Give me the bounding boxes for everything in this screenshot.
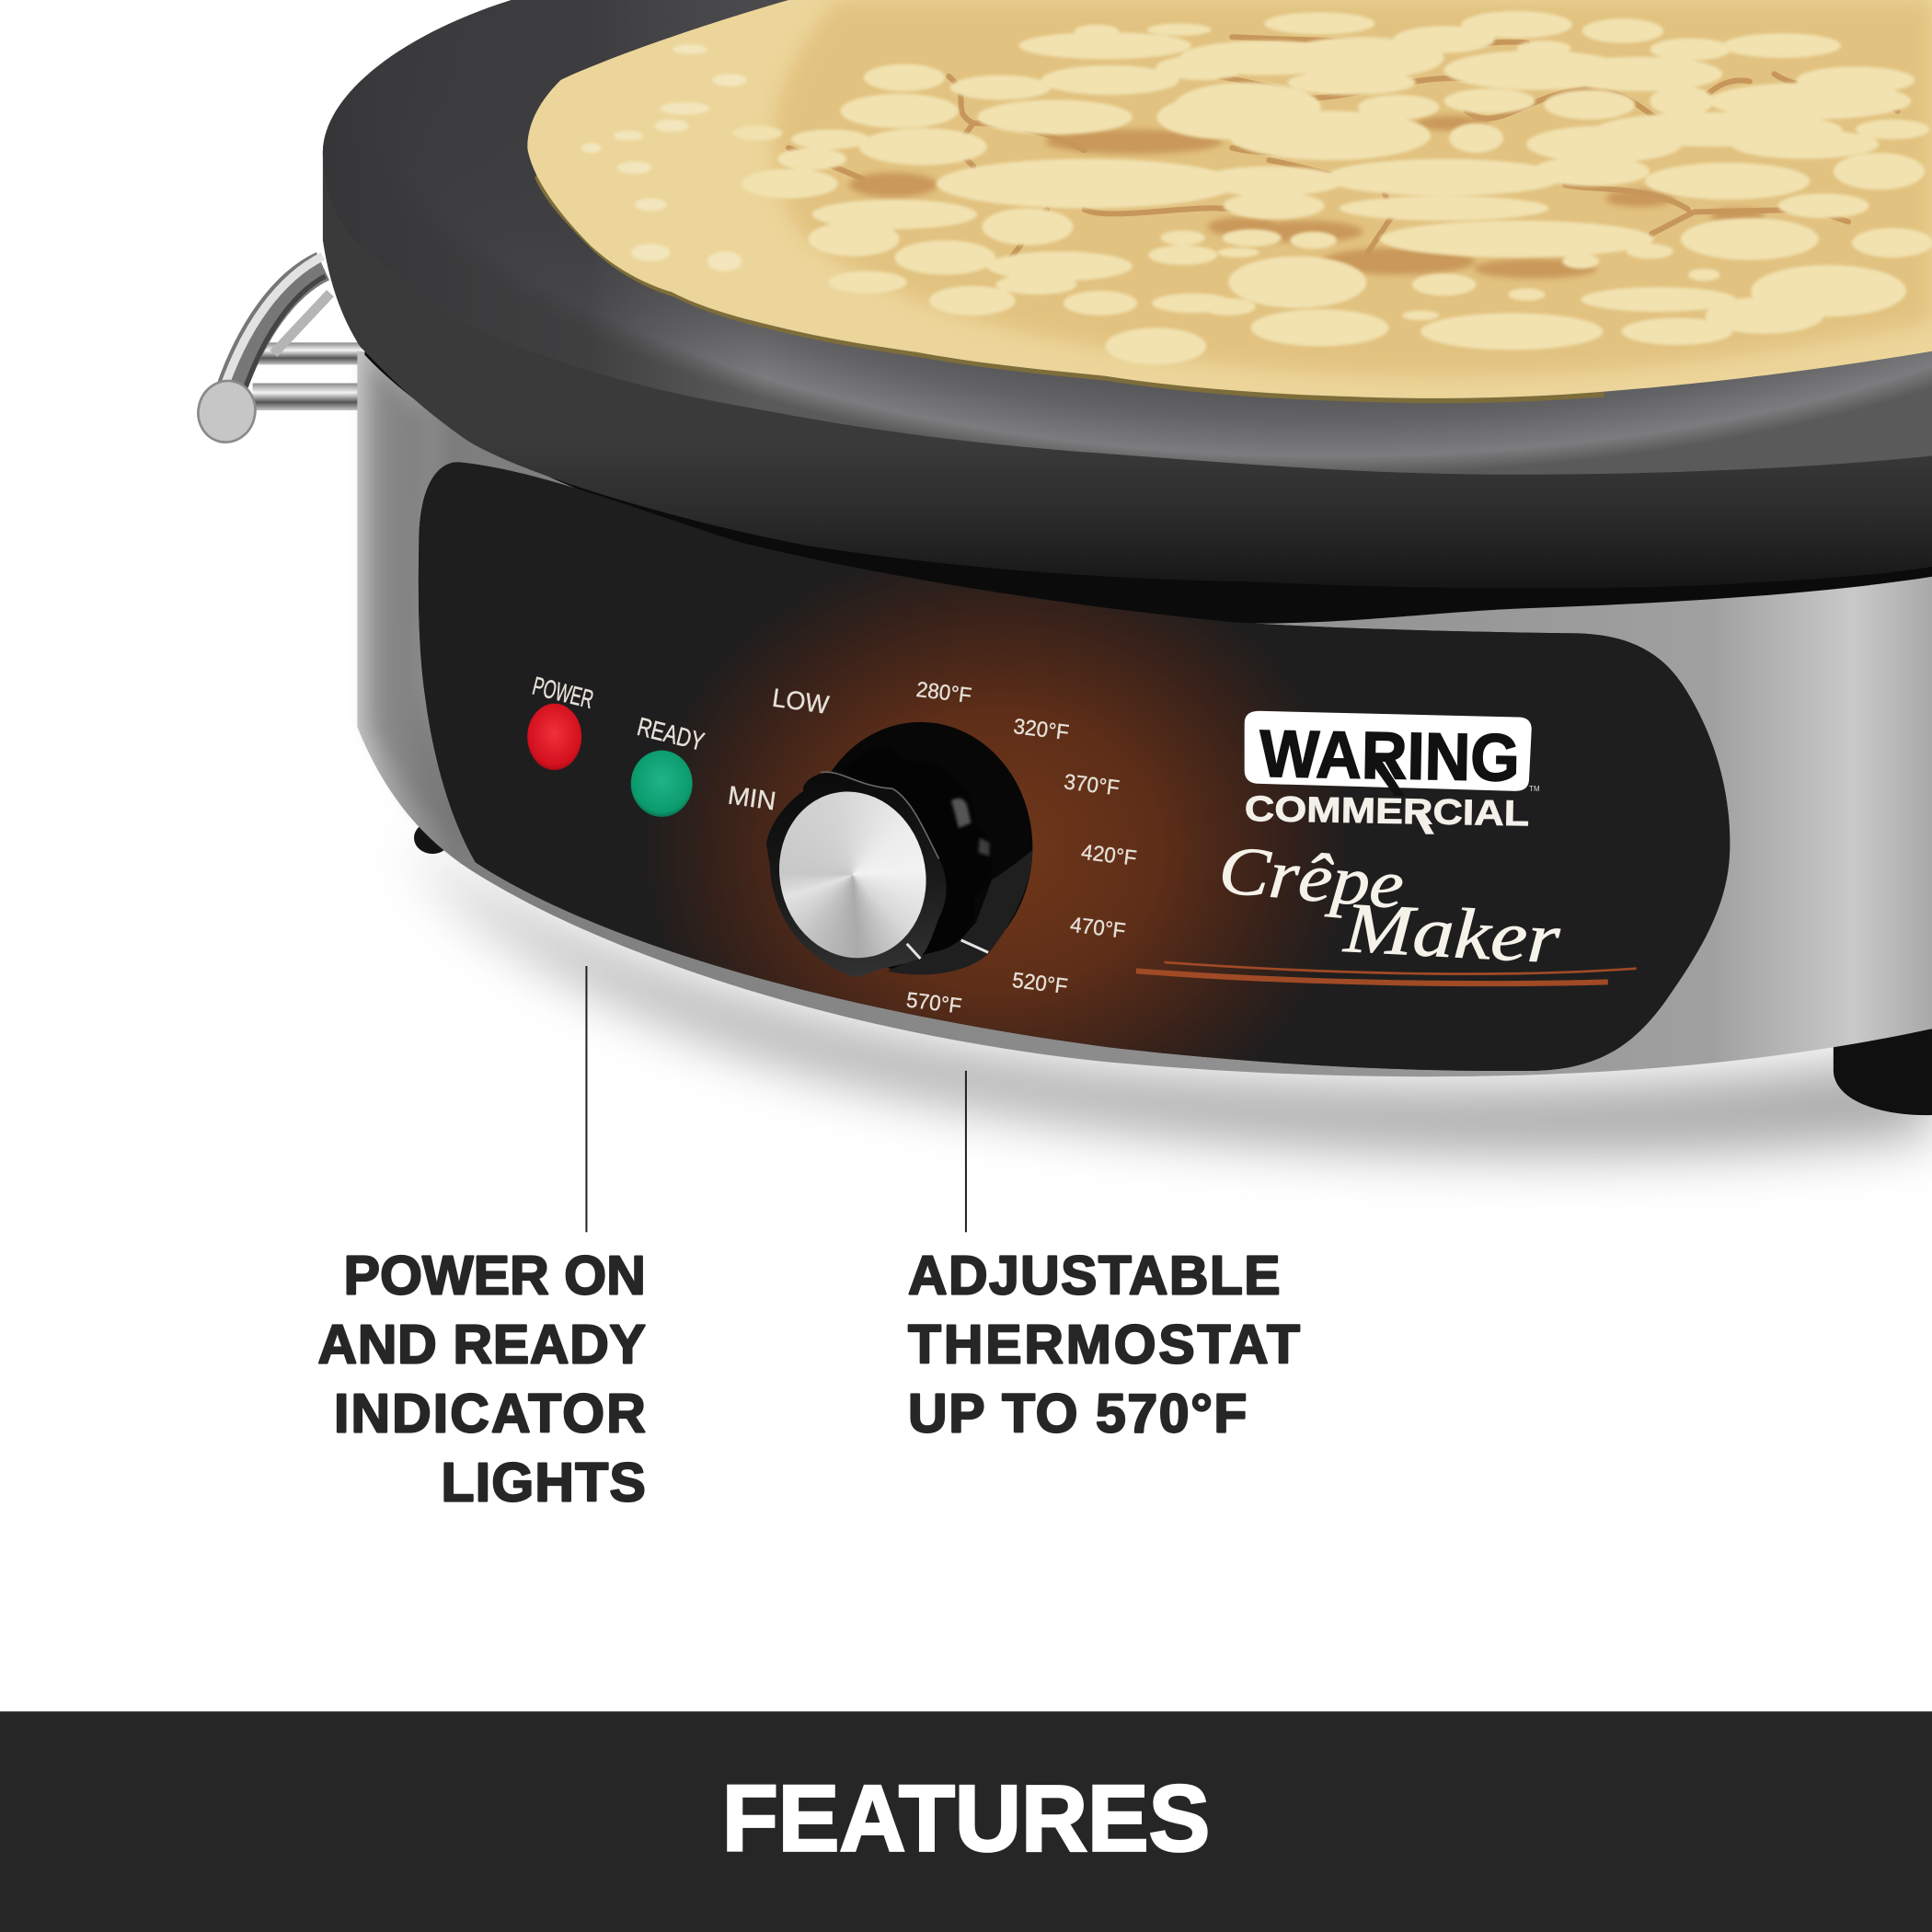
indicator: ready light: READY [635,712,707,756]
dial labels: 420°F [1080,840,1138,870]
callout: power and ready lights: LIGHTS [441,1453,646,1512]
product name: Crêpe Maker: Crêpe [1216,832,1407,924]
footer heading: FEATURES [722,1766,1210,1871]
callout: adjustable thermostat [908,1246,1300,1443]
crêpe oil edge [535,165,1604,403]
griddle left shading [323,0,863,411]
knob ridged body [813,746,992,954]
dial labels [726,677,1138,1018]
browned lace streaks [788,37,1898,259]
dial labels: 520°F [1011,968,1069,998]
product: crêpe maker [191,0,1932,1153]
dial labels: 570°F [905,987,963,1018]
callout: power and ready lights [318,1246,646,1512]
indicator: ready light [631,712,707,817]
callout: adjustable thermostat: ADJUSTABLE [908,1246,1281,1305]
brand logo: Waring Commercial: TM [1529,785,1540,793]
dial labels: LOW [771,684,831,719]
brand logo: Waring Commercial: WARING [1259,718,1520,796]
foot: right [1834,1029,1932,1115]
brand logo: Waring Commercial [1245,711,1540,834]
stainless steel body [357,351,1932,1076]
pale blisters [733,11,1932,364]
callout: adjustable thermostat: UP TO 570°F [908,1384,1247,1443]
brand logo: Waring Commercial: COMMERCIAL [1245,789,1530,834]
knob brushed metal cap [766,780,939,971]
handle: chrome side handle [191,257,363,449]
griddle plate side [323,0,1932,588]
knob backing lower sheen [887,850,1032,974]
foot: left [414,822,451,854]
callout: power and ready lights: INDICATOR [334,1384,646,1443]
panel accent lines [1136,962,1637,983]
callout: adjustable thermostat: THERMOSTAT [908,1315,1300,1374]
rim specks [581,44,747,271]
thermostat knob [766,722,1032,977]
floor shadow [407,838,1932,1153]
browned interior [773,0,1932,376]
dial labels: 370°F [1063,769,1121,799]
knob flange highlight [821,772,939,858]
shadow gap under griddle plate [364,333,1932,624]
crêpe [517,0,1932,407]
browned patches [849,116,1765,279]
dial labels: MIN [726,780,777,815]
leader line: indicator lights [585,966,587,1232]
product name: Crêpe Maker: Maker [1341,888,1562,978]
dial labels: 470°F [1069,913,1127,943]
indicator: power light: POWER [530,672,596,714]
dial labels: 320°F [1012,714,1070,744]
body left dark shading [370,357,468,850]
dial labels: 280°F [914,677,972,707]
footer banner [0,1711,1932,1932]
control panel [407,450,1750,1090]
callout: power and ready lights: AND READY [318,1315,646,1374]
leader line: thermostat [965,1071,967,1232]
griddle plate top surface [323,0,1932,475]
crêpe base [517,0,1932,407]
product name: Crêpe Maker [1216,832,1562,978]
knob ridge highlights [951,799,989,857]
knob backing disc [809,722,1032,973]
knob pointer ticks [907,940,988,959]
callout: power and ready lights: POWER ON [344,1246,646,1305]
knob front flange [766,771,947,977]
indicator: power light [527,672,596,770]
